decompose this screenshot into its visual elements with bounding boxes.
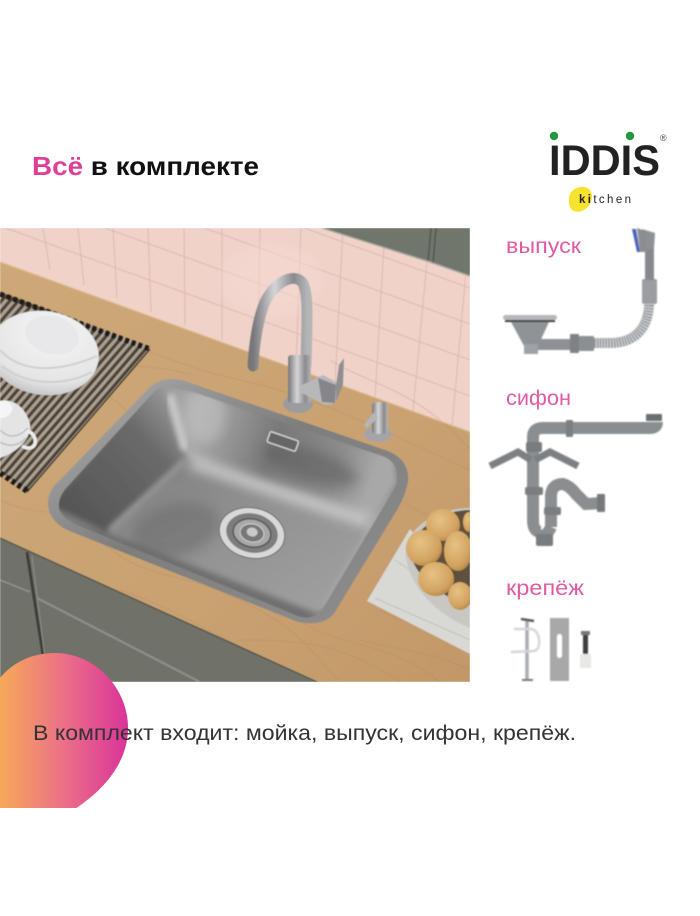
base cabinets xyxy=(0,538,317,682)
icon: drain assembly xyxy=(503,228,657,354)
dish rack xyxy=(0,292,150,492)
napkin xyxy=(367,529,470,654)
logo: IDDIS kitchen xyxy=(549,132,667,212)
white cup xyxy=(0,400,35,458)
soap dispenser xyxy=(364,402,392,442)
wood countertop xyxy=(0,262,470,682)
label: крепёж: крепёж xyxy=(506,577,584,600)
pink tiled wall xyxy=(0,228,470,432)
faucet xyxy=(253,278,344,413)
overflow xyxy=(267,431,299,452)
bowl of apricots xyxy=(406,508,475,628)
label: сифон: сифон xyxy=(506,387,571,410)
icon: fasteners xyxy=(511,618,591,681)
logo: IDDIS kitchen: ® xyxy=(660,133,667,143)
gradient blob xyxy=(0,653,128,815)
logo: IDDIS kitchen: IDDIS xyxy=(549,137,660,185)
white bowl xyxy=(0,310,100,396)
logo: IDDIS kitchen: kitchen xyxy=(579,194,631,206)
kitchen photo xyxy=(0,228,470,682)
title: Всё в комплекте xyxy=(32,151,259,181)
wall cabinet xyxy=(322,228,470,276)
drain xyxy=(218,506,286,560)
label: выпуск: выпуск xyxy=(506,235,582,258)
icon: siphon xyxy=(490,414,662,546)
summary text: В комплект входит: мойка, выпуск, сифон, крепёж. xyxy=(33,722,576,745)
stainless sink xyxy=(48,378,409,624)
